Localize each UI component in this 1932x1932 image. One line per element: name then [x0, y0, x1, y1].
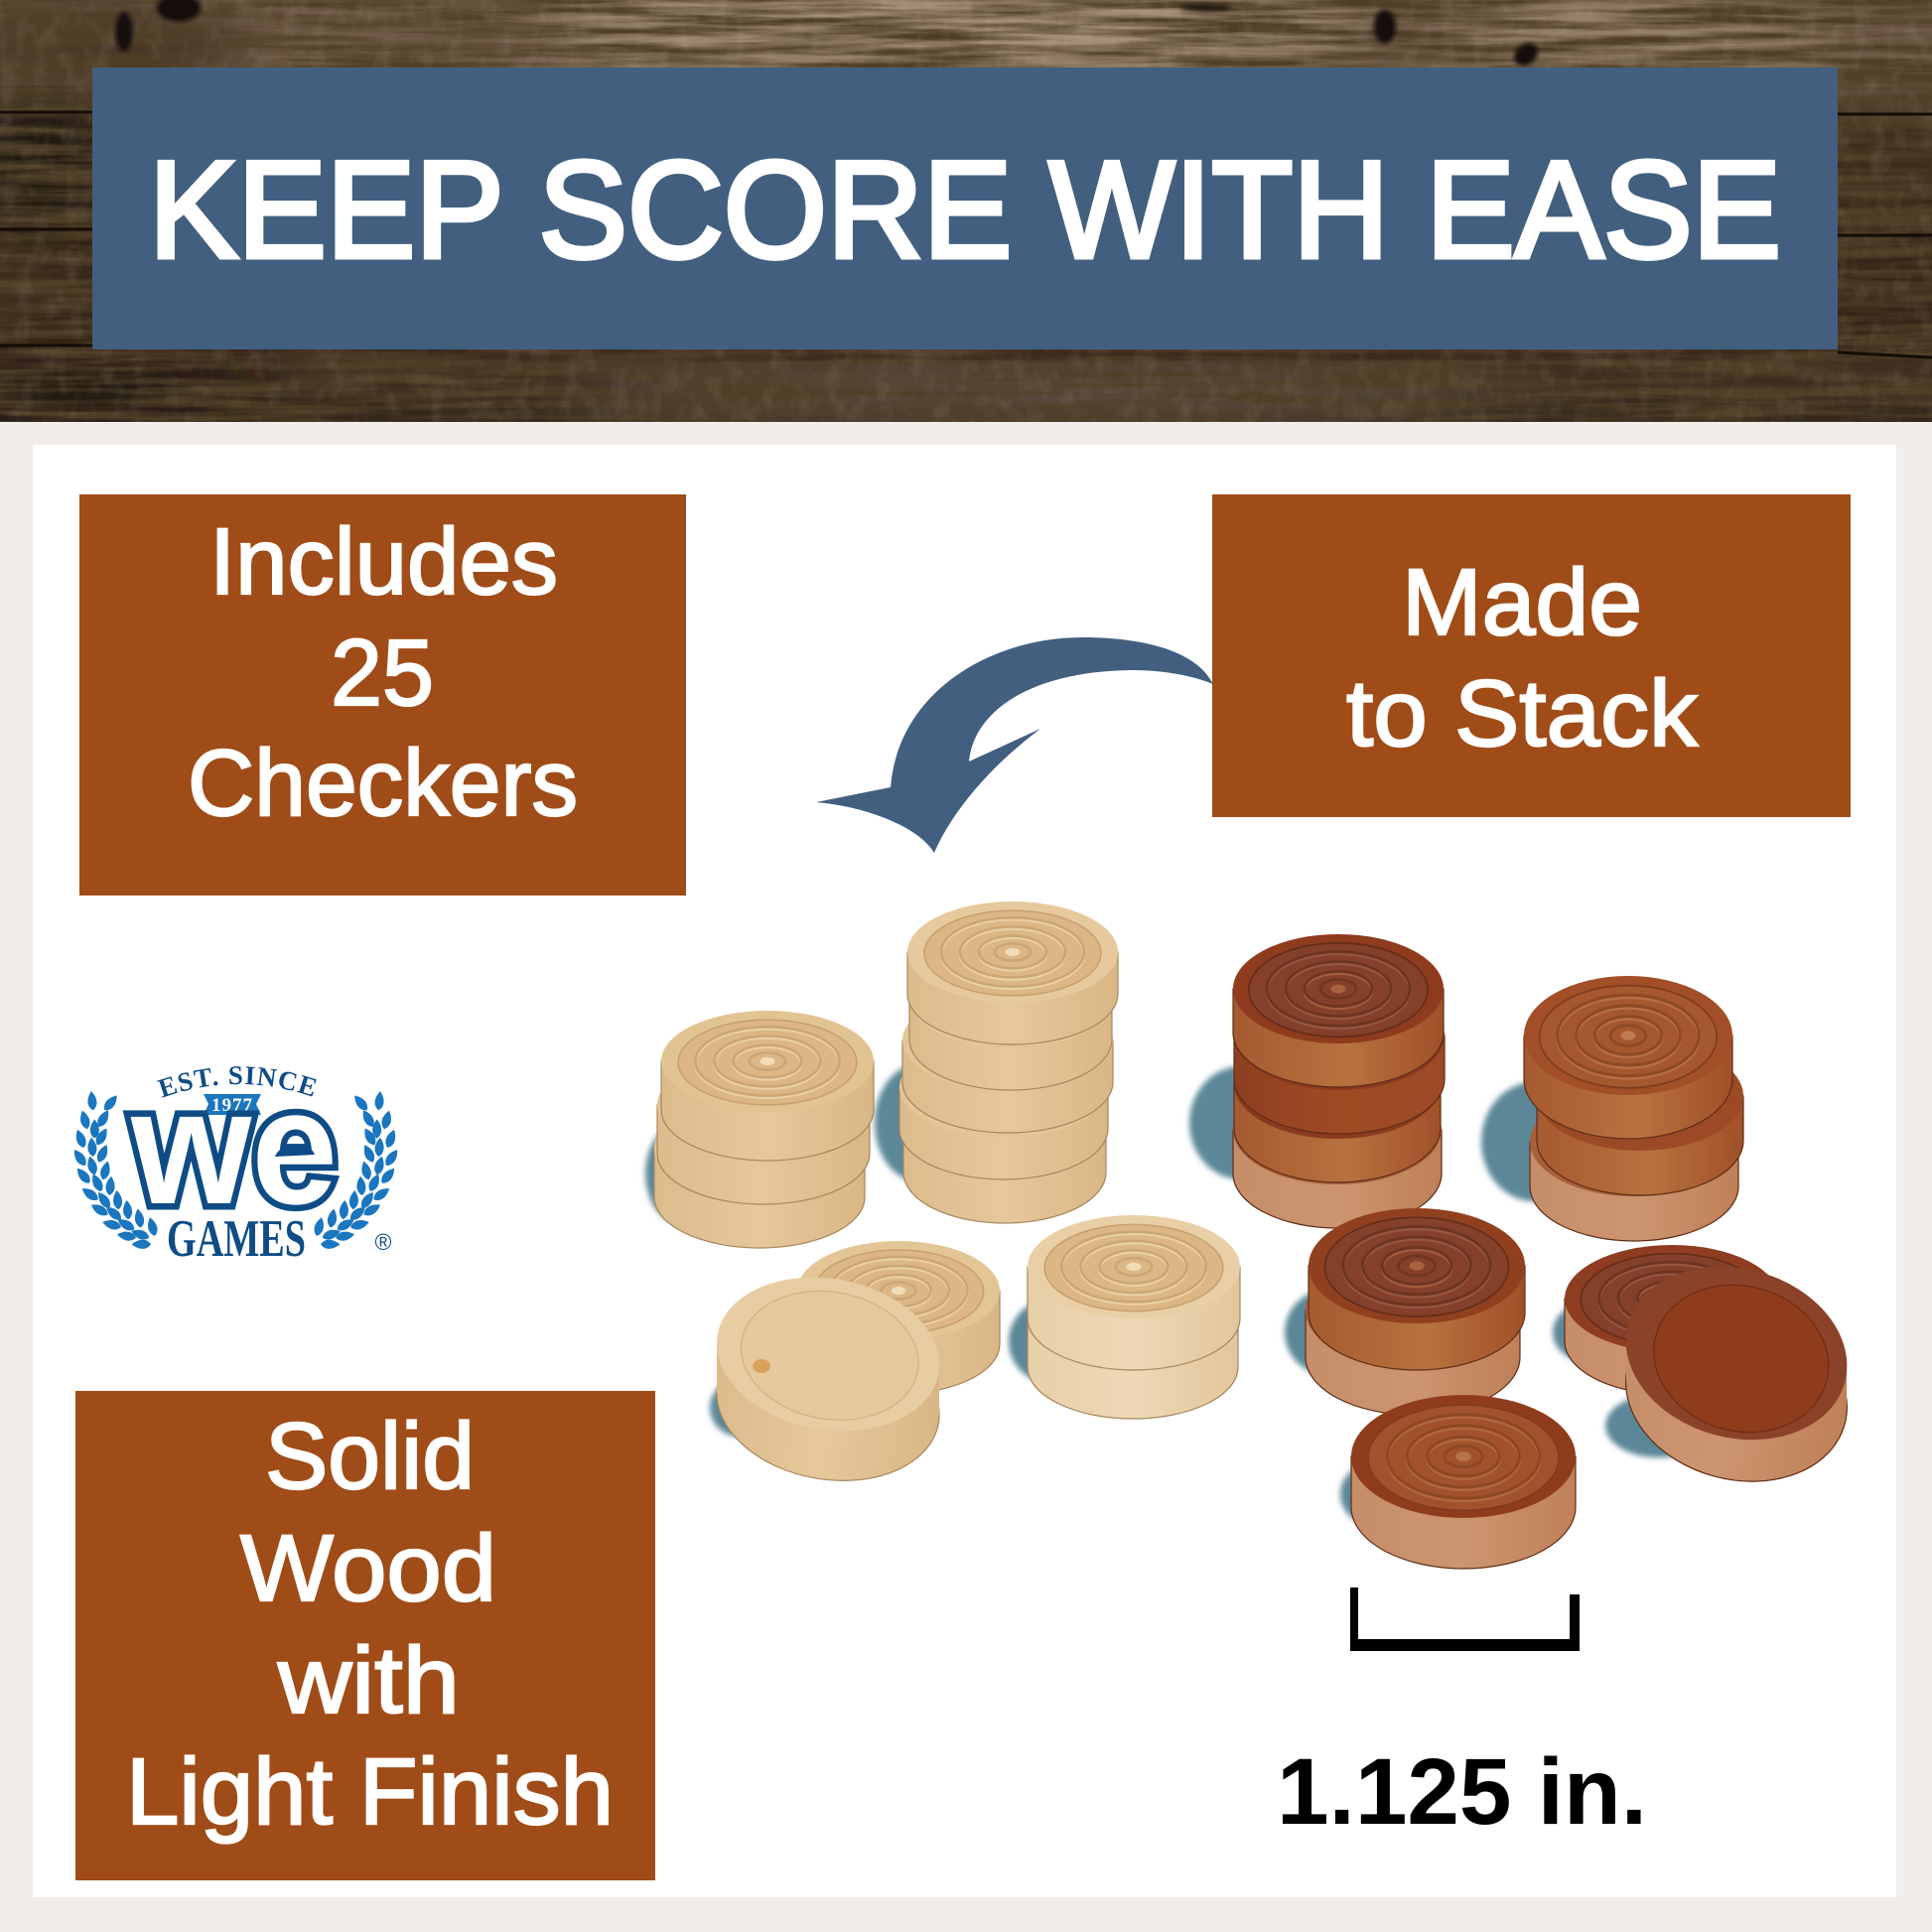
- single stained checker: [1351, 1395, 1576, 1569]
- ribbon: 1977: [204, 1094, 261, 1116]
- callout: made to stack: to Stack: [1346, 661, 1699, 766]
- callout: solid wood with light finish: Wood: [240, 1516, 496, 1621]
- overlapping natural pair: [705, 1241, 1000, 1497]
- size bracket: [1350, 1587, 1580, 1651]
- callout: includes 25 checkers: Includes: [209, 509, 558, 615]
- callout: solid wood with light finish: with: [277, 1628, 460, 1733]
- stack of two stained checkers: [1306, 1208, 1525, 1415]
- shadows under checkers: [645, 1064, 1711, 1526]
- stack of two natural checkers: [1028, 1215, 1240, 1419]
- checkers photo: natural wood: [654, 901, 1240, 1497]
- title text: KEEP SCORE WITH EASE: [149, 133, 1781, 287]
- stack of three stained checkers: [1524, 976, 1743, 1241]
- icon: laurel wreath left: [70, 1091, 159, 1249]
- size label: 1.125 in.: [1277, 1739, 1647, 1845]
- logo e counter: [275, 1145, 315, 1157]
- white content panel: [33, 445, 1896, 1897]
- checkers photo: stained wood: [1233, 934, 1866, 1569]
- registered mark: ®: [375, 1229, 392, 1255]
- callout: solid wood with light finish: Light Finish: [126, 1739, 614, 1845]
- stack of four stained checkers: [1233, 934, 1445, 1228]
- title banner: [92, 68, 1838, 349]
- logo text: est. since: EST. SINCE: [157, 1066, 317, 1098]
- callout: made to stack: [1212, 494, 1851, 817]
- logo: WE Games: [73, 1055, 397, 1268]
- logo wordmark: we: we: [130, 1055, 338, 1238]
- wood plank header: [0, 0, 1932, 427]
- callout: includes 25 checkers: 25: [331, 621, 434, 726]
- callout: includes 25 checkers: [79, 494, 686, 896]
- stack of three natural checkers: [654, 1011, 874, 1248]
- logo text: games: GAMES: [167, 1210, 306, 1268]
- icon: laurel wreath right: [313, 1091, 401, 1249]
- callout: made to stack: Made: [1402, 550, 1642, 655]
- stack of five natural checkers: [899, 901, 1118, 1223]
- callout: solid wood with light finish: [75, 1391, 655, 1880]
- callout: solid wood with light finish: Solid: [265, 1404, 475, 1509]
- arrow: curved blue pointing to checkers: [816, 637, 1213, 853]
- ribbon: 1977: 1977: [211, 1095, 253, 1116]
- overlapping stained pair: [1565, 1243, 1866, 1505]
- callout: includes 25 checkers: Checkers: [188, 731, 578, 836]
